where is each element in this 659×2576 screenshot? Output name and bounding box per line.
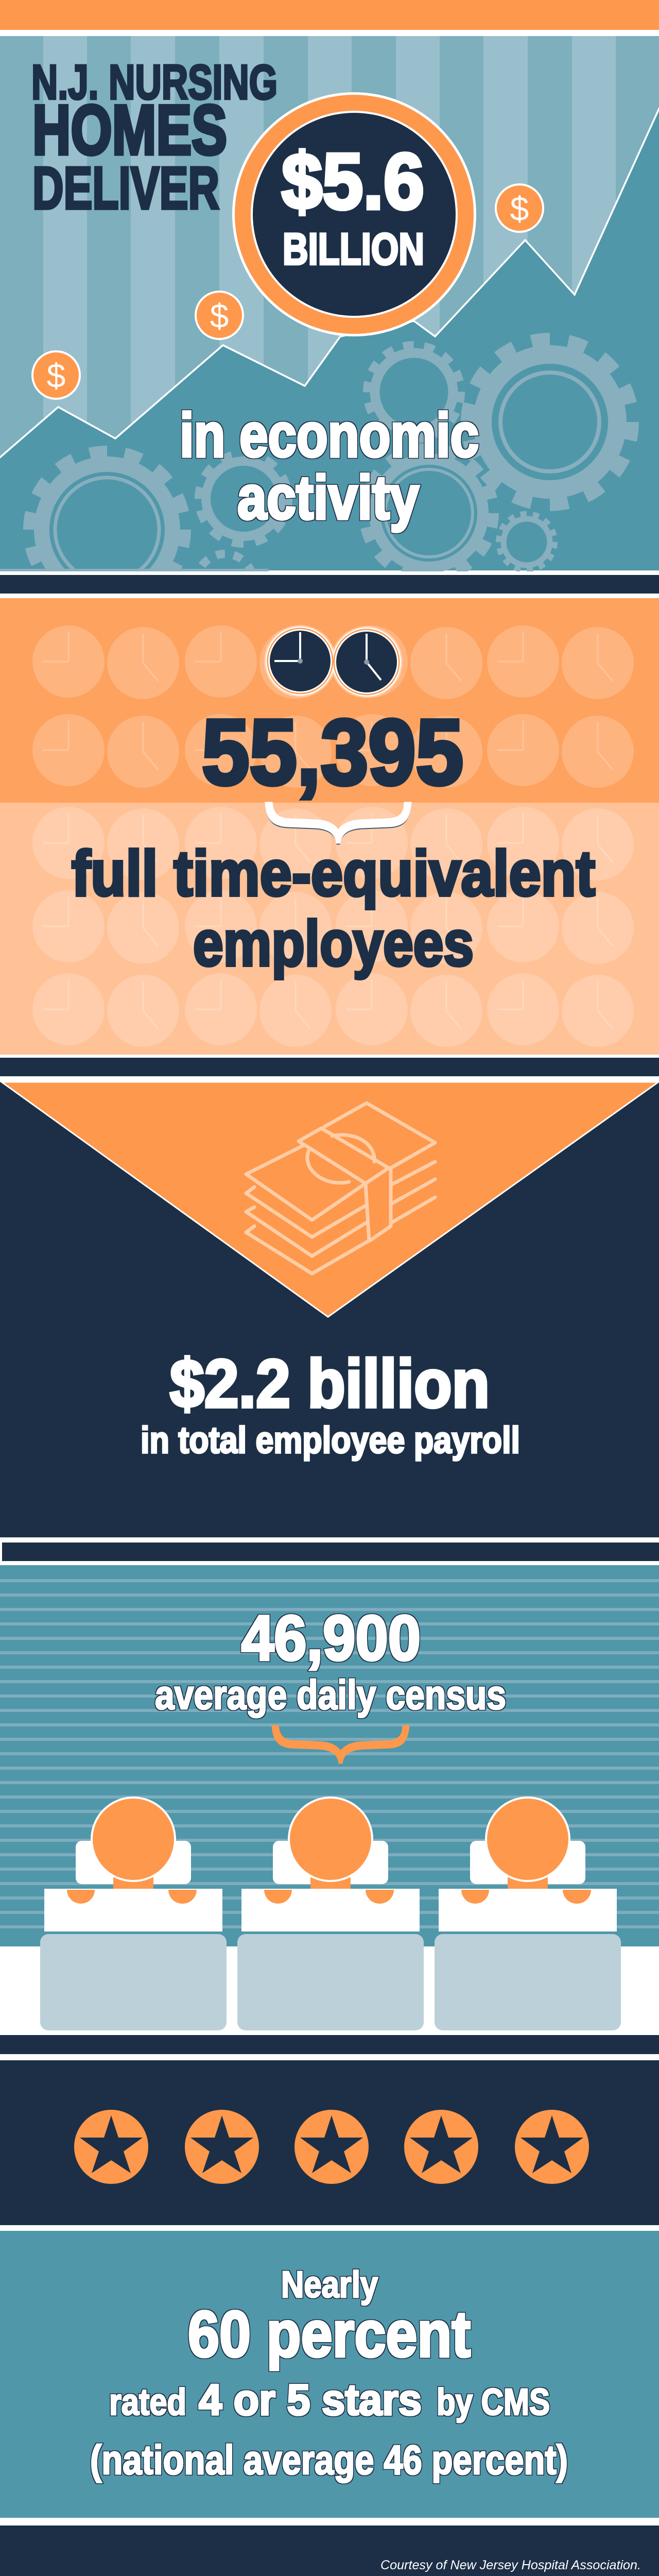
number: 55,395: 55,395 (202, 701, 463, 804)
employees label (72, 838, 595, 979)
rating text: Nearly (281, 2264, 378, 2306)
census number: 46,900 (241, 1603, 421, 1674)
panel: payroll (0, 1082, 659, 1537)
dollar badge: BILLION (283, 225, 424, 274)
panel: employees (0, 598, 659, 1055)
navy divider (0, 575, 659, 594)
brace (266, 803, 411, 844)
top orange band (0, 0, 659, 30)
background clocks (32, 625, 634, 1047)
icon: dollar coins: $ (47, 357, 65, 395)
icon: money stack (246, 1103, 435, 1274)
panel: star ratings (0, 2035, 659, 2225)
payroll text: $2.2 billion (170, 1346, 490, 1421)
icon: dollar coins (31, 183, 544, 400)
in economic activity text (180, 401, 479, 532)
in economic activity text: activity (237, 463, 419, 532)
heading (31, 55, 278, 222)
rating text: (national average 46 percent) (90, 2437, 568, 2483)
icon: five stars (74, 2110, 589, 2184)
heading: N.J. NURSING (31, 55, 278, 110)
orange brace (272, 1726, 409, 1763)
credit text: Courtesy of New Jersey Hospital Association. (380, 2558, 641, 2572)
residents in beds (40, 1797, 621, 2030)
census label: average daily census (155, 1672, 506, 1718)
rising line chart area (0, 103, 659, 571)
rating text: 60 percent (188, 2298, 471, 2370)
employees label: full time-equivalent (72, 838, 595, 909)
rating text: rated (109, 2382, 186, 2423)
payroll text: in total employee payroll (141, 1420, 520, 1461)
payroll text (141, 1346, 520, 1461)
navy divider (0, 1058, 659, 1076)
rating text: by CMS (437, 2382, 550, 2423)
panel: rating statement (0, 2231, 659, 2518)
navy divider (2, 1543, 659, 1561)
icon: two clocks (264, 625, 403, 698)
horizontal stripes (0, 1579, 659, 1928)
dollar badge: $5.6 (282, 137, 424, 226)
rating text: 4 or 5 stars (199, 2376, 422, 2424)
panel: census (0, 1565, 659, 2030)
dollar badge (232, 92, 476, 336)
gears (0, 333, 639, 571)
in economic activity text: in economic (180, 401, 479, 470)
icon: dollar coins: $ (210, 297, 229, 335)
rating text (90, 2264, 568, 2483)
background stripes (43, 36, 616, 571)
orange triangle (2, 1082, 658, 1317)
employees label: employees (193, 908, 474, 979)
panel: economic activity (0, 36, 659, 611)
icon: dollar coins: $ (510, 190, 529, 228)
footer (0, 2526, 659, 2576)
heading: HOMES (32, 91, 227, 169)
heading: DELIVER (32, 155, 219, 222)
